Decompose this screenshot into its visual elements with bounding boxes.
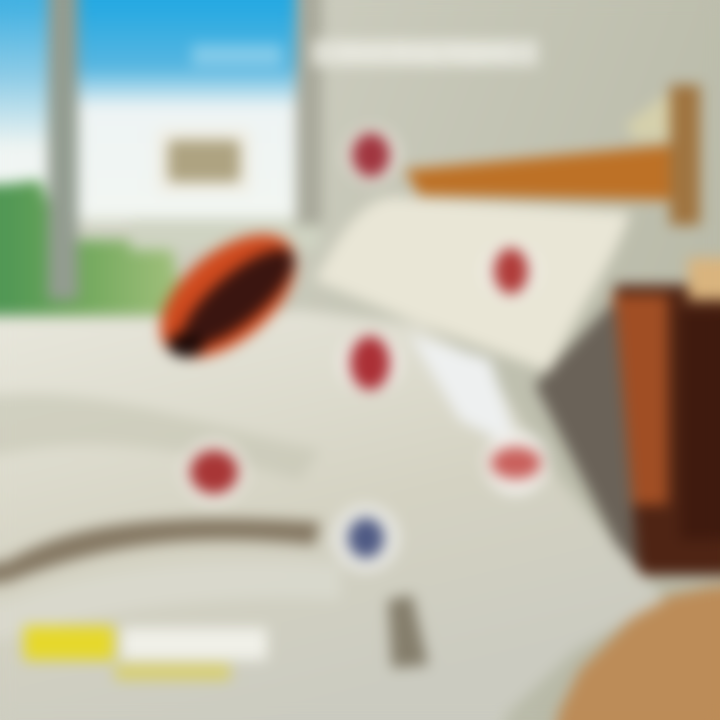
floor bbox=[555, 585, 720, 720]
big bed bug bbox=[138, 211, 318, 381]
window background bbox=[0, 0, 320, 315]
title: Bed Bug Signs bbox=[340, 39, 510, 66]
window frame posts bbox=[48, 0, 322, 300]
marker: left bbox=[182, 440, 246, 504]
bed folds and shadow bbox=[0, 519, 428, 668]
marker: centre bbox=[340, 333, 400, 393]
nightstand and dark gap bbox=[535, 258, 720, 590]
bug spot markers bbox=[182, 127, 548, 572]
title bbox=[192, 39, 538, 66]
callout label bbox=[156, 128, 252, 194]
marker: right bbox=[484, 431, 548, 495]
duvet bbox=[0, 310, 665, 720]
headboard bbox=[405, 85, 700, 225]
caption text bbox=[24, 626, 267, 680]
marker: blue bbox=[332, 504, 400, 572]
marker: top bbox=[344, 127, 400, 183]
marker: pillow bbox=[483, 243, 539, 299]
pillow bbox=[315, 197, 630, 372]
